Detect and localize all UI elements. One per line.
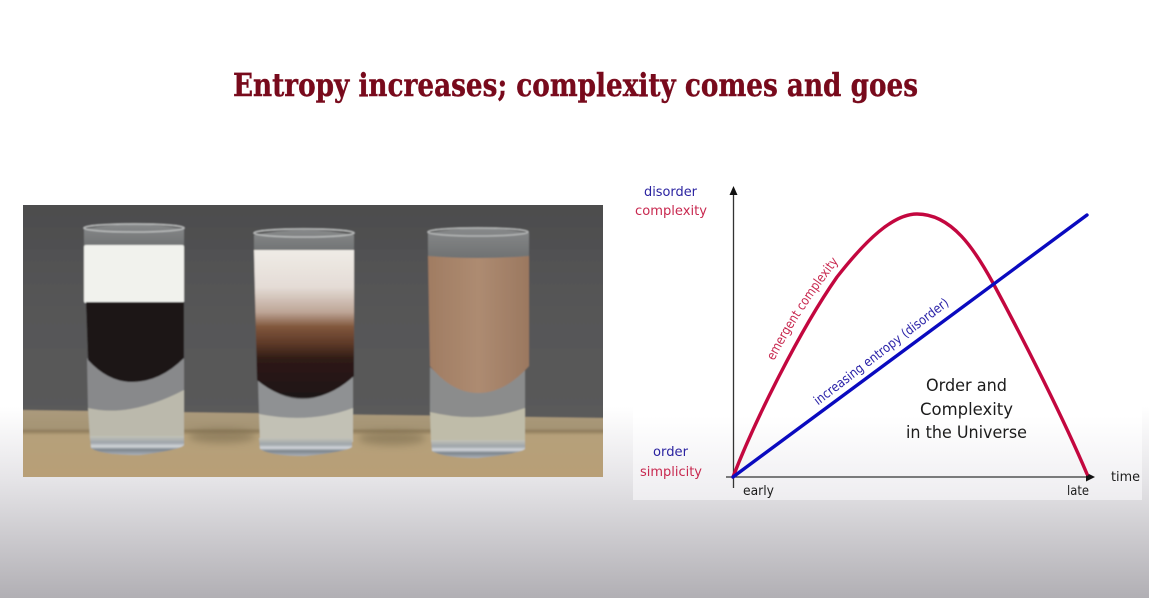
photo backdrop wall xyxy=(20,202,610,427)
y axis top labels: complexity xyxy=(635,203,707,219)
chart panel: order and complexity in the universe xyxy=(633,184,1142,500)
y axis xyxy=(730,186,738,488)
glass 2: partially mixed xyxy=(254,229,354,456)
chart caption: Order and xyxy=(926,376,1007,396)
label: increasing entropy (disorder): increasing entropy (disorder) xyxy=(811,296,952,409)
photo: three glasses mixing xyxy=(20,202,610,480)
wooden table xyxy=(20,410,610,480)
label: emergent complexity: emergent complexity xyxy=(768,257,838,360)
chart caption xyxy=(906,376,1027,443)
chart caption: Complexity xyxy=(920,400,1013,420)
x axis labels xyxy=(743,470,1140,499)
y axis bottom labels: simplicity xyxy=(640,464,702,480)
y axis top labels xyxy=(635,184,707,219)
title: Entropy increases; complexity comes and goes xyxy=(233,66,918,104)
blue line: increasing entropy xyxy=(733,215,1087,477)
x axis xyxy=(726,472,1095,482)
y axis top labels: disorder xyxy=(644,184,697,200)
table shadows xyxy=(188,429,256,443)
y axis bottom labels: order xyxy=(653,444,688,460)
x axis labels: time xyxy=(1111,470,1140,485)
glass 1: layered milk over cola xyxy=(84,224,184,455)
red curve: emergent complexity xyxy=(733,214,1087,477)
chart background xyxy=(633,178,1142,500)
x axis labels: late xyxy=(1067,484,1089,499)
x axis labels: early xyxy=(743,484,774,499)
y axis bottom labels xyxy=(640,444,702,480)
glass 3: fully mixed xyxy=(428,228,529,458)
chart caption: in the Universe xyxy=(906,423,1027,443)
